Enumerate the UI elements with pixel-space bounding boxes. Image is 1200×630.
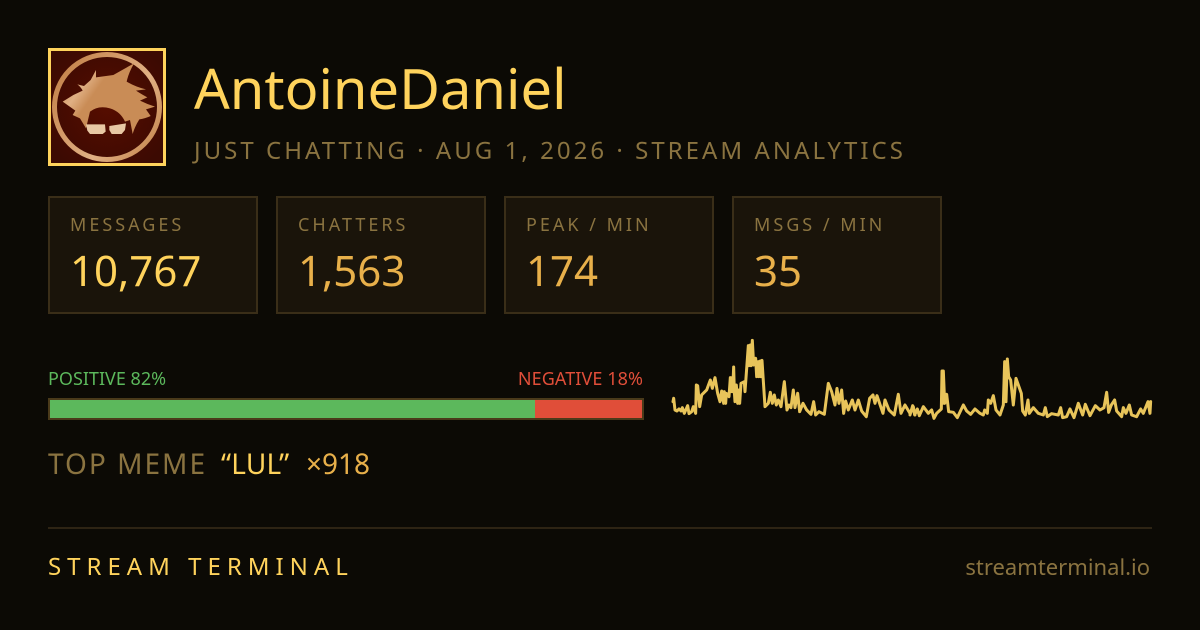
stat card: peak per minute — [504, 196, 714, 314]
positive label: POSITIVE 82% — [48, 367, 166, 391]
icon: avatar — [48, 48, 166, 166]
brand name: STREAM TERMINAL — [48, 550, 354, 583]
stat card: peak per minute: 174 — [526, 242, 598, 299]
stat card: chatters: CHATTERS — [298, 213, 408, 237]
stat card: messages per minute: 35 — [754, 242, 802, 299]
title: AntoineDaniel — [194, 50, 567, 126]
stat card: chatters — [276, 196, 486, 314]
stat card: peak per minute: PEAK / MIN — [526, 213, 652, 237]
sparkline chart — [672, 338, 1152, 420]
stat card: messages: MESSAGES — [70, 213, 184, 237]
site url: streamterminal.io — [965, 552, 1150, 582]
stat card: messages: 10,767 — [70, 242, 201, 299]
sentiment bar — [48, 398, 644, 420]
top meme count: ×918 — [306, 445, 370, 483]
negative label: NEGATIVE 18% — [518, 367, 643, 391]
stat card: messages per minute: MSGS / MIN — [754, 213, 885, 237]
stat card: messages — [48, 196, 258, 314]
top meme label: TOP MEME — [48, 445, 207, 483]
stat card: messages per minute — [732, 196, 942, 314]
stat card: chatters: 1,563 — [298, 242, 405, 299]
top meme value: “LUL” — [221, 445, 289, 483]
subtitle: JUST CHATTING · AUG 1, 2026 · STREAM ANALYTICS — [194, 134, 906, 167]
